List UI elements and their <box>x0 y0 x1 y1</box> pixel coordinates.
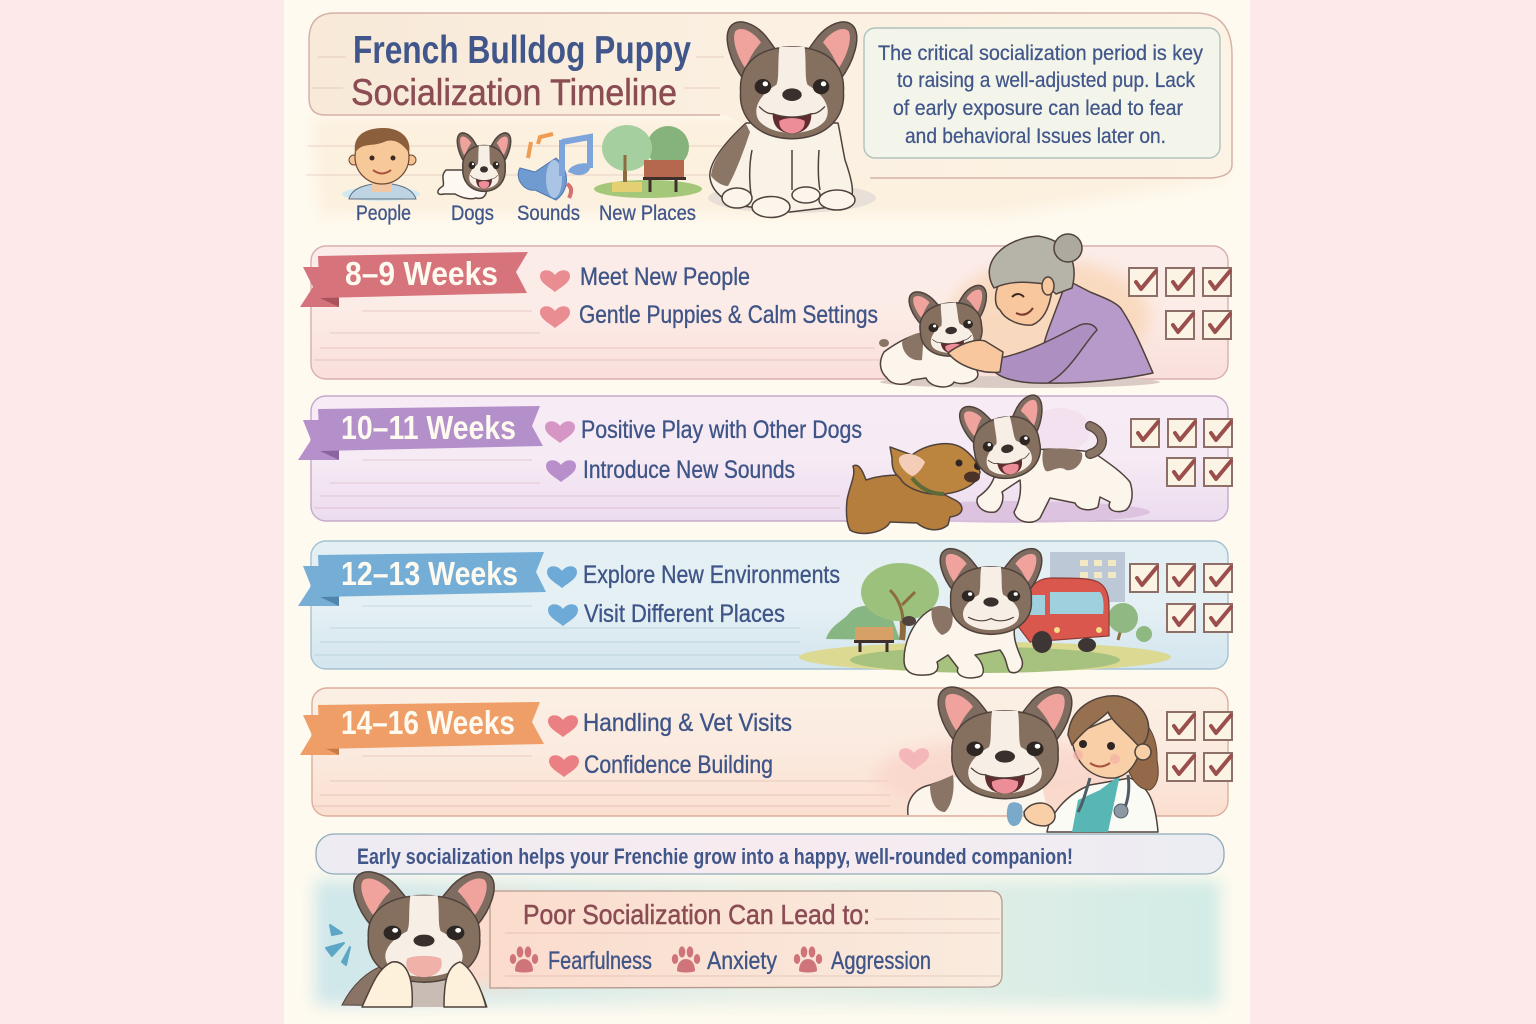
panel: 8-9 weeks <box>300 234 1231 388</box>
peach fade behind puppy <box>455 895 525 987</box>
icon: person <box>342 128 420 201</box>
checkboxes <box>1131 419 1232 486</box>
warning box <box>490 891 1002 988</box>
ribbon <box>298 552 546 606</box>
ribbon <box>300 702 544 755</box>
ribbon: 10–11 Weeks <box>341 409 516 446</box>
ribbon <box>300 252 528 307</box>
panel: bottom wash <box>315 880 1220 1005</box>
item: explore environments: Explore New Environments <box>583 561 840 589</box>
callout text box: of early exposure can lead to fear <box>893 97 1183 120</box>
item: meet new people: Meet New People <box>580 263 750 291</box>
illustration: grandmother with puppy <box>879 234 1160 388</box>
item: fearfulness <box>510 946 652 975</box>
panel: poor socialization <box>326 872 1002 1007</box>
item: fearfulness: Fearfulness <box>548 947 652 975</box>
warning heading: Poor Socialization Can Lead to: <box>523 899 870 930</box>
checkboxes <box>1167 712 1232 781</box>
icon labels <box>356 202 696 225</box>
item: gentle puppies: Gentle Puppies & Calm Settings <box>579 301 878 329</box>
item: new sounds: Introduce New Sounds <box>583 456 795 484</box>
item: aggression <box>794 946 931 975</box>
item: anxiety: Anxiety <box>707 947 777 975</box>
illustration: puppies playing <box>846 394 1150 533</box>
panel: 10-11 weeks <box>298 394 1232 533</box>
icon labels: People <box>356 202 411 225</box>
row background <box>311 246 1228 379</box>
item: meet new people <box>540 263 750 292</box>
banner message <box>316 834 1224 874</box>
icon: pale heart <box>899 748 929 770</box>
illustration: puppy in park with bus <box>799 549 1171 678</box>
icon labels: New Places <box>599 202 696 225</box>
title: French Bulldog Puppy <box>353 29 691 72</box>
banner message: Early socialization helps your Frenchie grow into a happy, well-rounded companion! <box>357 844 1073 869</box>
pink wash <box>875 740 1125 810</box>
item: handling and vet: Handling & Vet Visits <box>583 709 792 737</box>
ribbon: 14–16 Weeks <box>341 704 515 741</box>
icon labels: Dogs <box>451 202 494 225</box>
ribbon <box>298 406 543 460</box>
checkboxes <box>1129 268 1231 339</box>
row background <box>312 688 1228 816</box>
header title panel <box>309 13 1232 178</box>
main puppy <box>708 22 876 218</box>
callout text box: to raising a well-adjusted pup. Lack <box>897 69 1195 92</box>
ribbon: 8–9 Weeks <box>345 255 498 292</box>
icon: speaker and music <box>518 134 591 200</box>
item: aggression: Aggression <box>831 947 931 975</box>
callout text box: and behavioral Issues later on. <box>905 125 1166 148</box>
checkboxes <box>1130 564 1232 632</box>
item: anxiety <box>672 946 777 975</box>
row background <box>311 396 1228 521</box>
callout text box <box>864 28 1220 158</box>
illustration: vet with puppy <box>908 687 1158 832</box>
icon: worry drops <box>326 925 350 965</box>
icon labels: Sounds <box>517 202 580 225</box>
subtitle: Socialization Timeline <box>351 72 677 113</box>
callout text box: The critical socialization period is key <box>878 42 1203 65</box>
row background <box>311 541 1228 669</box>
header paper wash <box>312 118 1226 215</box>
item: positive play: Positive Play with Other Dogs <box>581 416 862 444</box>
panel: 14-16 weeks <box>300 687 1232 832</box>
icon: dog <box>438 133 511 199</box>
central cream column <box>284 0 1250 1024</box>
icon: park <box>594 125 702 198</box>
header outline <box>309 13 1232 178</box>
panel: header <box>306 13 1232 225</box>
item: visit places: Visit Different Places <box>584 600 785 628</box>
panel: 12-13 weeks <box>298 541 1232 678</box>
ribbon: 12–13 Weeks <box>341 555 518 592</box>
item: confidence: Confidence Building <box>584 751 773 779</box>
illustration: worried puppy <box>342 872 494 1007</box>
